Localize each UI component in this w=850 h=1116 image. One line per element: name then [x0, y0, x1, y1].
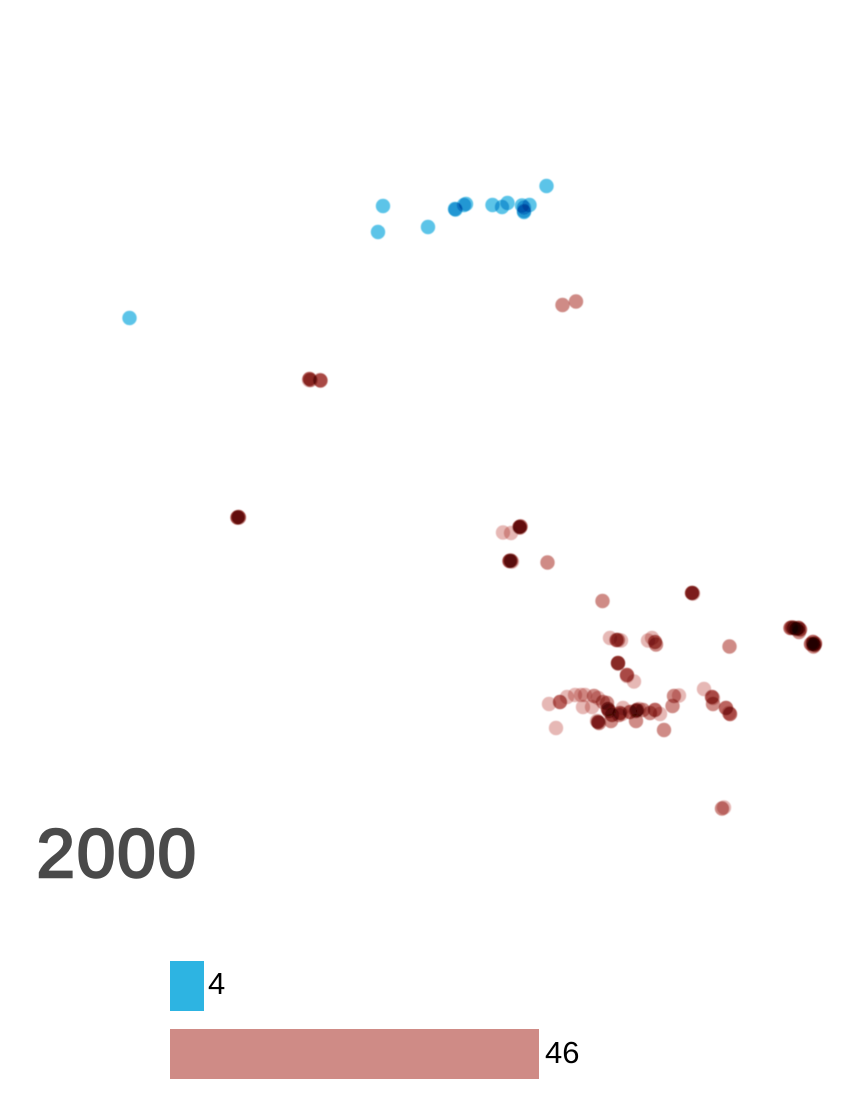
red dots cluster [230, 294, 822, 816]
red bar value: 46 [545, 1035, 579, 1070]
red bar [170, 1029, 539, 1079]
year title: 2000 [36, 815, 198, 892]
blue dots cluster [122, 179, 554, 325]
blue bar [170, 961, 204, 1011]
blue bar value: 4 [208, 966, 225, 1001]
